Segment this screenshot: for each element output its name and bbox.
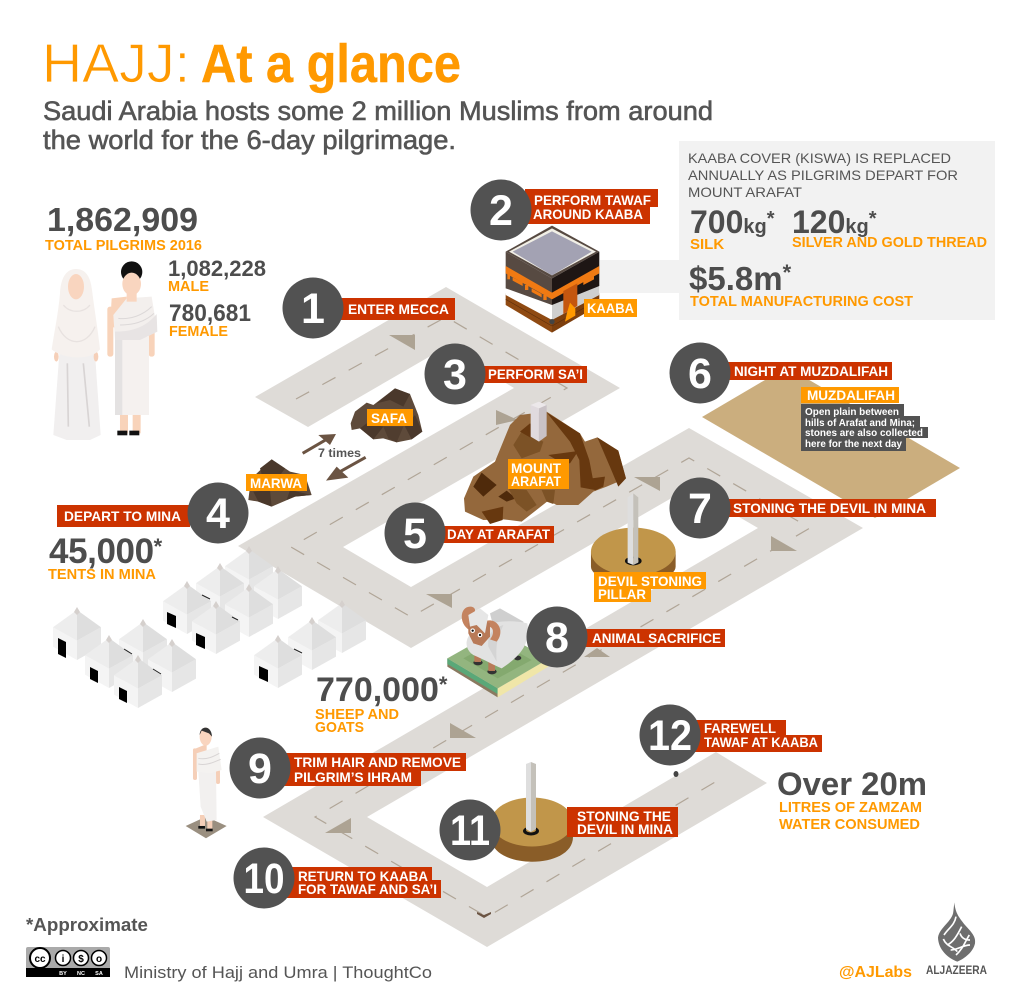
icon: creative commons badge: SA	[95, 971, 103, 977]
stat: sheep and goats: 770,000	[316, 671, 439, 709]
stat: tents	[48, 532, 163, 583]
orange tag: mount arafat	[508, 459, 569, 489]
step 9: trim hair	[230, 738, 466, 798]
orange tag: devil stoning pillar: PILLAR	[598, 586, 646, 602]
step 9: trim hair: PILGRIM’S IHRAM	[294, 769, 412, 785]
icon: devil stoning pillar at jamarat	[591, 493, 676, 582]
orange tag: devil stoning pillar: DEVIL STONING	[598, 573, 702, 589]
icon: woman pilgrim	[52, 269, 101, 440]
icon: pilgrim on base	[186, 728, 227, 838]
step 11: stoning the devil: DEVIL IN MINA	[577, 821, 673, 837]
stat: zamzam water: LITRES OF ZAMZAM	[779, 799, 922, 816]
step 3: perform sa'i: 3	[443, 351, 467, 399]
step 10: return to kaaba: 10	[244, 855, 284, 903]
orange tag: mount arafat: ARAFAT	[511, 473, 561, 489]
step 5: day at arafat	[384, 502, 554, 564]
icon: sheep on grass	[447, 607, 548, 697]
title: At a glance	[201, 34, 461, 94]
muzdalifah plain	[702, 367, 960, 518]
step 12: farewell tawaf	[640, 704, 822, 766]
logo: al jazeera	[926, 902, 987, 977]
logo: al jazeera: ALJAZEERA	[926, 963, 987, 977]
stat: zamzam water: WATER CONSUMED	[779, 816, 920, 833]
stat: tents: *	[154, 534, 163, 559]
step 12: farewell tawaf: FAREWELL	[704, 720, 776, 736]
icon: kaaba	[506, 226, 599, 333]
panel: kiswa facts: $5.8m	[689, 260, 783, 297]
muzdalifah note: stones are also collected	[805, 427, 923, 439]
subtitle	[43, 96, 713, 155]
panel: kiswa facts: 120kg	[792, 204, 869, 240]
stat: male: MALE	[168, 278, 209, 295]
panel: kiswa facts: *	[869, 208, 877, 230]
step 7: stoning the devil: 7	[688, 485, 712, 533]
orange tag: safa: SAFA	[371, 410, 407, 426]
icon: creative commons badge	[26, 947, 110, 977]
panel: kiswa facts: 700kg	[690, 204, 767, 240]
step 12: farewell tawaf: TAWAF AT KAABA	[704, 734, 818, 750]
step 4: depart to mina: DEPART TO MINA	[64, 508, 181, 524]
subtitle: the world for the 6-day pilgrimage.	[43, 125, 456, 155]
icon: mount arafat	[464, 402, 626, 524]
muzdalifah note: MUZDALIFAH	[807, 387, 895, 403]
stat: sheep and goats: GOATS	[315, 719, 364, 736]
road: pilgrimage route	[238, 287, 863, 947]
step 3: perform sa'i: PERFORM SA’I	[488, 366, 583, 382]
step 11: stoning the devil: STONING THE	[577, 808, 671, 824]
step 10: return to kaaba: FOR TAWAF AND SA’I	[298, 881, 437, 897]
stat: total pilgrims	[45, 201, 202, 254]
stat: female	[169, 300, 251, 340]
pilgrim couple figures	[52, 261, 157, 440]
subtitle: Saudi Arabia hosts some 2 million Muslims from around	[43, 96, 713, 126]
step 9: trim hair: 9	[248, 745, 272, 793]
step 6: night at muzdalifah: NIGHT AT MUZDALIFAH	[734, 363, 888, 379]
step 2: perform tawaf	[470, 180, 658, 240]
stat: tents: 45,000	[49, 532, 154, 571]
muzdalifah note: Open plain between	[805, 406, 899, 418]
icon: creative commons badge: i	[62, 954, 65, 965]
stat: male	[168, 256, 266, 295]
orange tag: devil stoning pillar	[594, 572, 706, 602]
stat: male: 1,082,228	[168, 256, 266, 281]
step 10: return to kaaba: RETURN TO KAABA	[298, 868, 428, 884]
source credit: Ministry of Hajj and Umra | ThoughtCo	[124, 963, 432, 982]
panel: kiswa facts: *	[767, 208, 775, 230]
step 8: animal sacrifice	[526, 606, 725, 668]
step 1: enter mecca: ENTER MECCA	[348, 301, 449, 317]
icon: creative commons badge: cc	[34, 954, 46, 965]
7 times text: 7 times	[318, 448, 361, 460]
stat: sheep and goats	[315, 671, 448, 736]
step 5: day at arafat: DAY AT ARAFAT	[447, 526, 550, 542]
panel: kiswa facts: TOTAL MANUFACTURING COST	[690, 293, 913, 310]
step 8: animal sacrifice: ANIMAL SACRIFICE	[592, 630, 721, 646]
icon: creative commons badge: o	[96, 954, 102, 965]
stat: sheep and goats: *	[439, 672, 448, 697]
step 7: stoning the devil: STONING THE DEVIL IN MINA	[733, 500, 926, 516]
icon: safa rock	[351, 388, 422, 442]
title: HAJJ:	[42, 32, 190, 94]
stat: female: 780,681	[169, 300, 251, 327]
step 6: night at muzdalifah	[670, 342, 892, 404]
stat: total pilgrims: TOTAL PILGRIMS 2016	[45, 237, 202, 254]
step 6: night at muzdalifah: 6	[688, 350, 712, 398]
panel: kiswa facts: *	[783, 260, 792, 285]
icon: 7 times arrows	[303, 434, 366, 481]
step 11: stoning the devil: 11	[450, 807, 490, 855]
icon: marwa rock	[248, 459, 312, 507]
panel: kiswa facts: KAABA COVER (KISWA) IS REPLACED	[688, 150, 951, 166]
icon: creative commons badge: BY	[59, 971, 67, 977]
step 3: perform sa'i	[424, 344, 587, 404]
step 4: depart to mina	[57, 482, 248, 544]
step 11: stoning the devil	[440, 800, 678, 860]
icon: creative commons badge: $	[78, 954, 84, 965]
panel: kiswa facts: ANNUALLY AS PILGRIMS DEPART FOR	[688, 167, 958, 183]
muzdalifah note: hills of Arafat and Mina;	[805, 417, 915, 429]
icon: creative commons badge: NC	[77, 971, 85, 977]
stat: sheep and goats: SHEEP AND	[315, 706, 399, 723]
stoning pillar: step 11	[491, 762, 573, 862]
orange tag: mount arafat: MOUNT	[511, 460, 561, 476]
muzdalifah note: here for the next day	[805, 438, 902, 450]
step 2: perform tawaf: AROUND KAABA	[533, 206, 643, 222]
stat: zamzam water: Over 20m	[777, 766, 927, 802]
panel: kiswa facts	[600, 141, 995, 320]
step 7: stoning the devil	[670, 478, 936, 538]
step 9: trim hair: TRIM HAIR AND REMOVE	[294, 754, 461, 770]
step 5: day at arafat: 5	[403, 510, 427, 558]
step 4: depart to mina: 4	[206, 490, 230, 538]
step 2: perform tawaf: 2	[489, 187, 513, 235]
orange tag: kaaba: KAABA	[587, 300, 634, 316]
road direction arrows	[325, 335, 797, 918]
icon: man pilgrim	[107, 261, 157, 435]
step 1: enter mecca	[282, 278, 455, 338]
title	[42, 32, 461, 94]
credit: ajlabs: @AJLabs	[839, 964, 912, 981]
stat: total pilgrims: 1,862,909	[47, 201, 198, 238]
panel: kiswa facts: SILVER AND GOLD THREAD	[792, 234, 987, 251]
panel: kiswa facts: SILK	[690, 236, 724, 253]
step 10: return to kaaba	[234, 848, 441, 908]
step 1: enter mecca: 1	[301, 285, 325, 333]
stat: tents: TENTS IN MINA	[48, 566, 156, 583]
footnote: *Approximate	[26, 915, 148, 935]
muzdalifah note	[801, 387, 928, 451]
step 12: farewell tawaf: 12	[648, 712, 692, 760]
panel: kiswa facts: MOUNT ARAFAT	[688, 184, 802, 200]
step 2: perform tawaf: PERFORM TAWAF	[534, 192, 651, 208]
step 8: animal sacrifice: 8	[545, 614, 569, 662]
stat: female: FEMALE	[169, 323, 228, 340]
stat: zamzam water	[777, 766, 927, 833]
orange tag: marwa: MARWA	[250, 475, 302, 491]
